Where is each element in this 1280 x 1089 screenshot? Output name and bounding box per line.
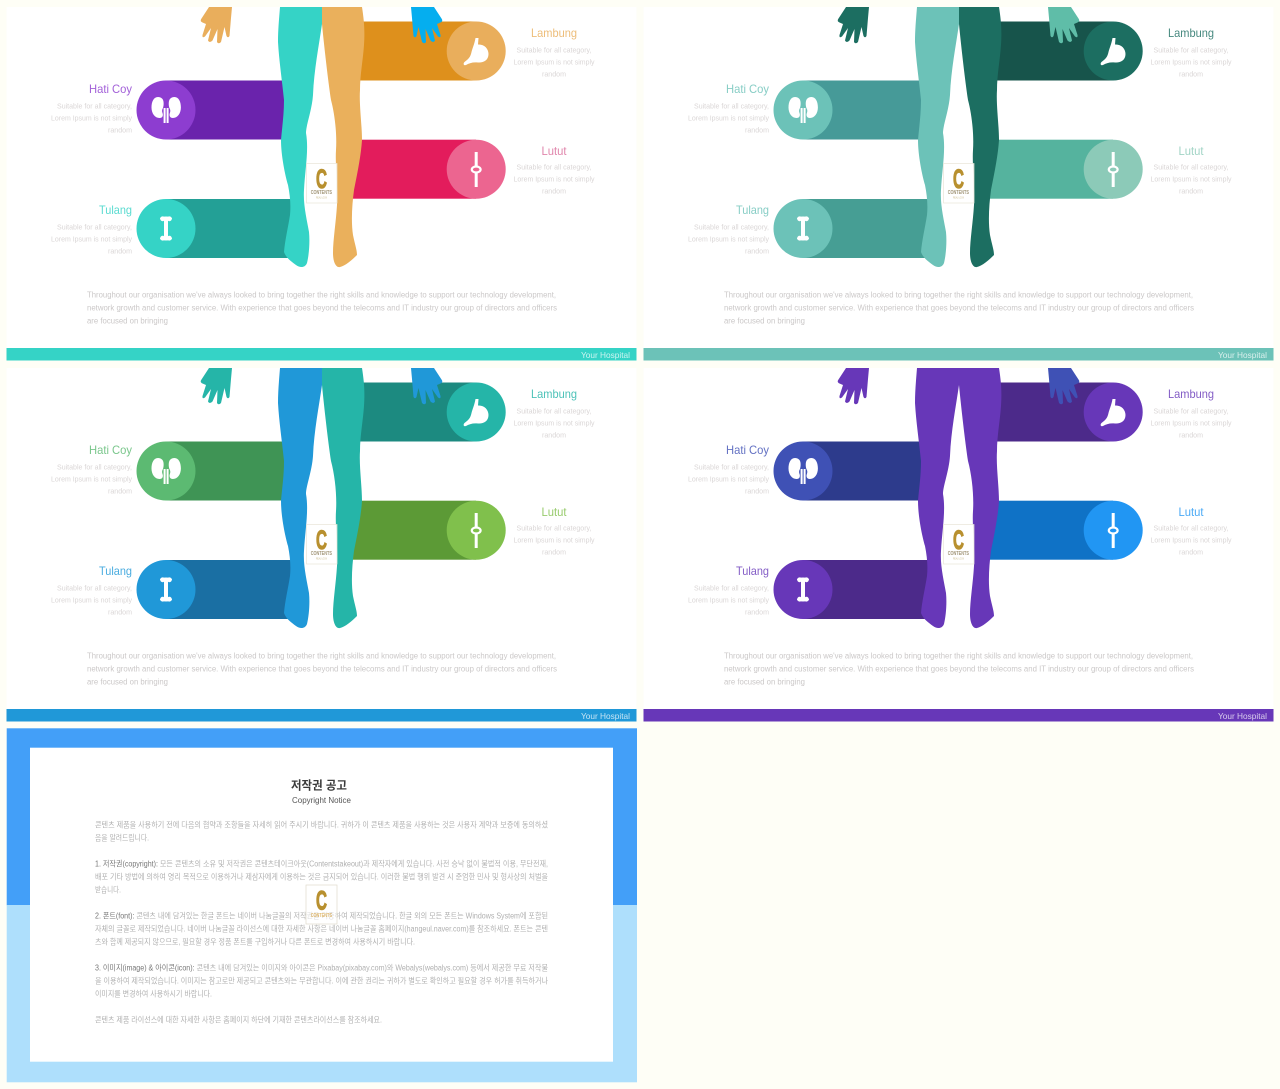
logo: REAL LOOK — [316, 196, 327, 200]
icon: left hand — [201, 7, 232, 43]
label: Hati Coy — [51, 82, 132, 134]
label: Lambung: Lambung — [531, 387, 577, 401]
pill: Tulang — [136, 560, 296, 619]
label: Lambung: Lorem Ipsum is not simply — [514, 418, 595, 428]
label: Lambung — [1150, 387, 1232, 440]
label: Hati Coy: Hati Coy — [726, 82, 769, 96]
body text: are focused on bringing — [87, 678, 168, 686]
pill: Lutut — [345, 501, 506, 560]
pill: Hati Coy — [774, 442, 923, 500]
notice text: 을 이용하여 제작되었습니다. 이미지는 참고로만 제공되고 콘텐츠와는 무관합니다. 이에 관한 권리는 귀하가 별도로 확인하고 필요할 경우 허가를 취득하거나 — [95, 975, 549, 985]
body text: network growth and customer service. With experience that goes beyond the telecoms and IT industry our group of directors and officers — [87, 664, 557, 674]
notice text: 1. 저작권(copyright): 모든 콘텐츠의 소유 및 저작권은 콘텐츠테이크아웃(Contentstakeout)과 제작자에게 있습니다. 사전 승낙 없이 불법적 이용, 무단전재, — [95, 858, 548, 868]
body text — [87, 652, 557, 686]
label: Tulang: Suitable for all category, — [57, 584, 132, 592]
pill: Tulang — [136, 199, 296, 258]
label: Tulang: random — [745, 608, 769, 616]
notice text: 츠와 함께 제공되지 않으므로, 필요할 경우 정품 폰트를 구입하거나 다른 폰트로 변경하여 사용하시기 바랍니다. — [95, 936, 415, 946]
label: Lutut: Suitable for all category, — [1154, 162, 1228, 172]
label: Lutut — [514, 505, 595, 556]
label: Tulang: Suitable for all category, — [694, 584, 769, 592]
label: Hati Coy: Suitable for all category, — [57, 102, 132, 110]
logo — [944, 524, 974, 564]
subheading: Copyright Notice — [292, 795, 351, 805]
label: Tulang: Tulang — [99, 564, 132, 578]
label: Lambung: Suitable for all category, — [516, 46, 592, 54]
label: Tulang: random — [745, 246, 769, 256]
label: Hati Coy: Lorem Ipsum is not simply — [51, 114, 132, 122]
label: Lambung: random — [542, 70, 566, 78]
body text: network growth and customer service. With experience that goes beyond the telecoms and IT industry our group of directors and officers — [724, 664, 1194, 674]
body text — [87, 290, 557, 326]
legs — [278, 368, 364, 628]
label: Lutut: Lorem Ipsum is not simply — [1150, 174, 1232, 184]
label: Hati Coy — [51, 443, 132, 496]
body text: are focused on bringing — [724, 678, 805, 686]
logo — [944, 164, 974, 203]
legs — [915, 7, 1001, 267]
logo: CONTENTS — [311, 913, 333, 919]
label: Tulang: Suitable for all category, — [694, 222, 769, 232]
label: Lutut — [1150, 505, 1232, 556]
logo: REAL LOOK — [316, 556, 327, 560]
footer bar: Your Hospital — [1218, 711, 1267, 721]
footer bar — [6, 709, 636, 722]
icon: right hand — [411, 7, 442, 43]
label: Lambung: Lambung — [1168, 387, 1214, 401]
logo: REAL LOOK — [953, 196, 964, 200]
notice text — [95, 819, 549, 1025]
pill: Hati Coy — [136, 442, 286, 500]
label: Hati Coy: Suitable for all category, — [694, 462, 769, 472]
icon: right hand — [1048, 7, 1079, 43]
label: Lambung — [514, 387, 595, 440]
panel: blue and teal legs — [6, 368, 636, 722]
label: Lutut: Lorem Ipsum is not simply — [1150, 536, 1232, 544]
logo: C — [953, 164, 964, 194]
panel: teal and orange legs — [6, 7, 636, 360]
label: Lutut: Lutut — [542, 144, 567, 158]
notice text: 음을 알려드립니다. — [95, 832, 149, 842]
footer bar — [6, 348, 636, 360]
body text: Throughout our organisation we've always looked to bring together the right skills and knowledge to support our technology development, — [87, 290, 556, 300]
logo: CONTENTS — [311, 551, 333, 557]
body text: Throughout our organisation we've always looked to bring together the right skills and knowledge to support our technology development, — [724, 652, 1193, 660]
body text — [724, 290, 1194, 326]
label: Tulang: Tulang — [736, 564, 769, 578]
label: Hati Coy: Lorem Ipsum is not simply — [688, 474, 769, 484]
notice text: 콘텐츠 제품을 사용하기 전에 다음의 협약과 조항들을 자세히 읽어 주시기 바랍니다. 귀하가 이 콘텐츠 제품을 사용하는 것은 사용자 계약과 보증에 동의하셨 — [95, 819, 549, 829]
pill: Hati Coy — [136, 80, 286, 140]
body text: network growth and customer service. With experience that goes beyond the telecoms and IT industry our group of directors and officers — [87, 304, 557, 312]
label: Tulang — [688, 203, 769, 256]
label: Lambung: Suitable for all category, — [1154, 46, 1228, 54]
label: Lutut: Lutut — [542, 505, 567, 519]
label: Tulang — [51, 564, 132, 616]
label: Tulang: random — [108, 246, 132, 256]
notice text: 이미지를 변경하여 사용하시기 바랍니다. — [95, 988, 212, 998]
icon: left hand — [838, 368, 869, 404]
label: Lambung: random — [542, 430, 566, 440]
label: Lutut: Lorem Ipsum is not simply — [514, 536, 595, 544]
label: Hati Coy: Suitable for all category, — [57, 462, 132, 472]
notice text: 배포 기타 방법에 의하여 영리 목적으로 이용하거나 제삼자에게 이용하는 것은 금지되어 있습니다. 이러한 불법 행위 발견 시 준엄한 민사 및 형사상의 처벌을 — [95, 871, 548, 881]
label: Lutut: Suitable for all category, — [516, 162, 592, 172]
label: Lambung: Lorem Ipsum is not simply — [1150, 58, 1232, 66]
logo: CONTENTS — [311, 190, 333, 196]
logo — [306, 164, 337, 203]
logo: C — [316, 164, 327, 194]
label: Lambung: Lambung — [531, 26, 577, 40]
pill: Lutut — [982, 140, 1143, 199]
label: Lambung: Lorem Ipsum is not simply — [514, 58, 595, 66]
pill: Lambung — [350, 22, 506, 80]
notice text: 콘텐츠 제품 라이선스에 대한 자세한 사항은 홈페이지 하단에 기재한 콘텐츠라이선스를 참조하세요. — [95, 1015, 382, 1025]
label: Lambung: random — [1179, 70, 1203, 78]
label: Hati Coy: Hati Coy — [89, 443, 132, 457]
notice text: 3. 이미지(image) & 아이콘(icon): 콘텐츠 내에 담겨있는 이미지와 아이콘은 Pixabay(pixabay.com)와 Webalys(webalys.com) 등에서 제공한 무료 저작물 — [95, 962, 548, 972]
label: Tulang: Lorem Ipsum is not simply — [51, 234, 132, 244]
logo: C — [953, 525, 964, 555]
icon: left hand — [201, 368, 232, 404]
body text: are focused on bringing — [724, 316, 805, 326]
label: Lutut: Lorem Ipsum is not simply — [514, 174, 595, 184]
label: Hati Coy — [688, 443, 769, 496]
label: Lutut: random — [1179, 548, 1203, 556]
notice text: 자체의 글꼴로 제작되었습니다. 네이버 나눔글꼴 라이선스에 대한 자세한 사항은 네이버 나눔글꼴 홈페이지(hangeul.naver.com)를 참조하세요. 폰트는 콘텐 — [95, 923, 548, 933]
label: Tulang: Tulang — [736, 203, 769, 217]
label: Lutut — [1150, 144, 1232, 196]
label: Lambung — [514, 26, 595, 78]
logo — [306, 885, 337, 924]
label: Tulang — [688, 564, 769, 616]
label: Hati Coy: Hati Coy — [89, 82, 132, 96]
body text: network growth and customer service. With experience that goes beyond the telecoms and IT industry our group of directors and officers — [724, 304, 1194, 312]
body text — [724, 652, 1194, 686]
pill: Lambung — [350, 382, 506, 442]
label: Tulang — [51, 203, 132, 256]
logo: C — [316, 886, 327, 916]
logo: REAL LOOK — [953, 556, 964, 560]
pill: Lambung — [987, 22, 1143, 80]
heading: 저작권 공고 — [291, 778, 347, 792]
icon: right hand — [411, 368, 442, 404]
notice text: 받습니다. — [95, 884, 121, 894]
label: Hati Coy: random — [108, 486, 132, 496]
pill: Tulang — [774, 560, 933, 619]
label: Lutut: random — [1179, 186, 1203, 196]
legs — [915, 368, 1001, 628]
label: Hati Coy: random — [745, 486, 769, 496]
label: Lutut: Suitable for all category, — [1154, 524, 1228, 532]
label: Hati Coy: Lorem Ipsum is not simply — [688, 114, 769, 122]
pill: Lutut — [345, 140, 506, 199]
label: Lutut: Lutut — [1178, 144, 1204, 158]
footer bar — [644, 348, 1274, 360]
pill: Lutut — [982, 501, 1143, 560]
label: Tulang: Suitable for all category, — [57, 222, 132, 232]
label: Hati Coy: random — [108, 126, 132, 134]
label: Lutut — [514, 144, 595, 196]
label: Hati Coy: Hati Coy — [726, 443, 769, 457]
label: Lambung: Suitable for all category, — [516, 406, 592, 416]
footer bar — [644, 709, 1274, 722]
label: Lutut: random — [542, 548, 566, 556]
logo — [306, 524, 337, 564]
label: Tulang: random — [108, 608, 132, 616]
label: Tulang: Lorem Ipsum is not simply — [51, 596, 132, 604]
body text: Throughout our organisation we've always looked to bring together the right skills and knowledge to support our technology development, — [87, 652, 556, 660]
pill: Lambung — [987, 382, 1143, 442]
logo: C — [316, 525, 327, 555]
footer bar: Your Hospital — [581, 350, 630, 360]
pill: Tulang — [774, 199, 933, 258]
footer bar: Your Hospital — [581, 711, 630, 721]
label: Hati Coy: random — [745, 126, 769, 134]
label: Hati Coy — [688, 82, 769, 134]
label: Lambung: Lambung — [1168, 26, 1214, 40]
footer bar: Your Hospital — [1218, 350, 1267, 360]
label: Tulang: Tulang — [99, 203, 132, 217]
label: Lutut: random — [542, 186, 566, 196]
icon: right hand — [1048, 368, 1079, 404]
label: Tulang: Lorem Ipsum is not simply — [688, 596, 769, 604]
label: Lambung — [1150, 26, 1232, 78]
body text: Throughout our organisation we've always looked to bring together the right skills and knowledge to support our technology development, — [724, 290, 1193, 300]
notice text: 2. 폰트(font): 콘텐츠 내에 담겨있는 한글 폰트는 네이버 나눔글꼴의 저작권을 기증하여 제작되었습니다. 한글 외의 모든 폰트는 Windows System에 포함된 — [95, 910, 548, 920]
label: Lutut: Lutut — [1178, 505, 1204, 519]
label: Hati Coy: Suitable for all category, — [694, 102, 769, 110]
body text: are focused on bringing — [87, 316, 168, 326]
label: Tulang: Lorem Ipsum is not simply — [688, 234, 769, 244]
panel: mint and dark green legs — [644, 7, 1274, 360]
panel: copyright notice — [7, 728, 637, 1082]
pill: Hati Coy — [774, 80, 923, 140]
logo: CONTENTS — [948, 190, 970, 196]
label: Hati Coy: Lorem Ipsum is not simply — [51, 474, 132, 484]
legs — [278, 7, 364, 267]
label: Lambung: Suitable for all category, — [1154, 406, 1228, 416]
label: Lutut: Suitable for all category, — [516, 524, 592, 532]
label: Lambung: Lorem Ipsum is not simply — [1150, 418, 1232, 428]
logo: CONTENTS — [948, 551, 970, 557]
label: Lambung: random — [1179, 430, 1203, 440]
panel: purple legs — [644, 368, 1274, 722]
icon: left hand — [838, 7, 869, 43]
